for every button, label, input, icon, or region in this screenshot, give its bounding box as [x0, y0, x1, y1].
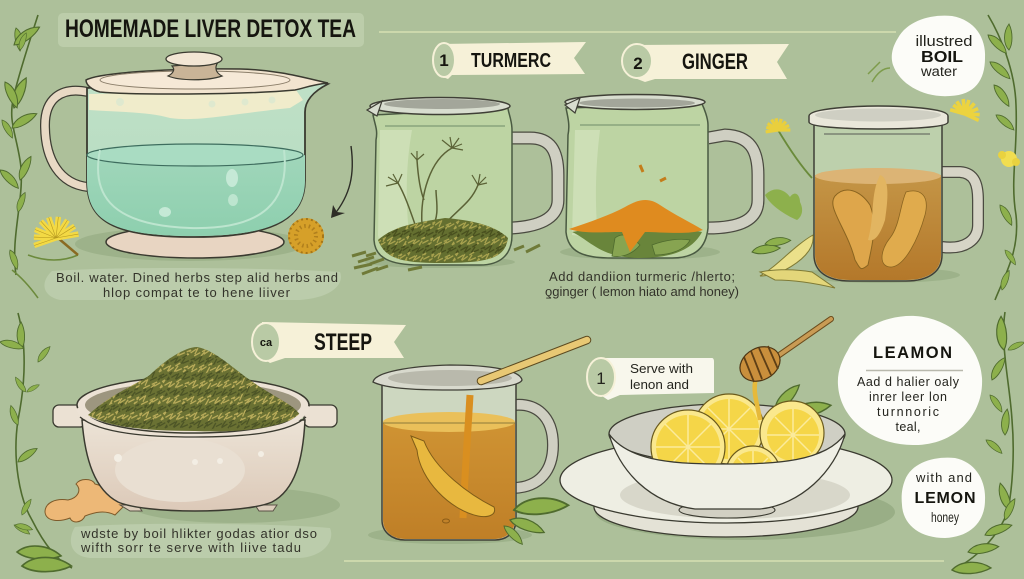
callout: leamon: [838, 316, 982, 445]
vine: bottom right: [952, 312, 1024, 574]
callout: leamon: LEAMON: [873, 344, 952, 362]
honey dipper: [775, 319, 831, 358]
step 2 ribbon: ginger: [622, 44, 789, 82]
plate and bowl of lemons: [560, 319, 895, 540]
small sprig: [868, 62, 890, 82]
callout: leamon: inrer leer lon: [869, 390, 947, 404]
callout: with lemon and honey: with and: [915, 470, 972, 485]
serve label: Serve with: [630, 362, 693, 376]
callout: illustrated boil water: [892, 16, 985, 96]
jar with turmeric: [560, 94, 758, 260]
step 2 ribbon: ginger: GINGER: [682, 49, 748, 74]
callout: leamon: teal,: [896, 420, 920, 434]
title: HOMEMADE LIVER DETOX TEA: [65, 15, 356, 43]
step 3 ribbon: steep: STEEP: [314, 329, 372, 356]
jar leaves: [513, 496, 569, 516]
callout: illustrated boil water: water: [920, 64, 958, 79]
ginger pieces: [833, 190, 874, 269]
step 1 ribbon: turmeric: 1: [439, 51, 449, 70]
caption: boil and serve: [71, 524, 331, 558]
caption: add dandelion: ƍginger ( lemon hiato amd honey): [545, 284, 739, 299]
herb mound: [88, 347, 300, 431]
icon: dandelion yellow: [30, 213, 79, 255]
caption: boil and serve: wdste by boil hlikter godas atior dso: [80, 526, 317, 541]
serve label: lenon and: [630, 378, 689, 392]
step: glass kettle with water: [45, 52, 328, 261]
arrow: [331, 146, 352, 218]
dandelions and leaves near mug: [751, 95, 985, 288]
herb stems: [398, 148, 478, 232]
callout: illustrated boil water: BOIL: [921, 49, 963, 66]
caption: boil water: hlop compat te to hene liiver: [103, 285, 291, 300]
step 1 ribbon: turmeric: TURMERC: [471, 50, 551, 72]
honey drip: [755, 378, 760, 420]
vine: top left: [0, 15, 78, 298]
caption: boil water: Boil. water. Dined herbs step alid herbs and: [56, 270, 338, 285]
steeping jar with tea: [368, 340, 587, 547]
dried herbs: [378, 218, 508, 263]
callout: illustrated boil water: illustred: [916, 33, 972, 50]
callout: leamon: turnnoric: [877, 405, 939, 419]
step 1 ribbon: turmeric: [433, 42, 586, 79]
ginger root: [45, 480, 125, 522]
step 2 ribbon: ginger: 2: [633, 54, 643, 73]
icon: dandelion puff: [288, 218, 324, 254]
serve label: 1: [596, 369, 606, 388]
mug with ginger tea: [800, 106, 978, 283]
bowl front: [609, 434, 845, 509]
serve label: [587, 358, 714, 400]
basil leaves: [770, 381, 802, 415]
bowl back: [609, 404, 845, 464]
title: [58, 13, 364, 47]
vine: bottom left: [0, 313, 72, 572]
ginger stick: [411, 436, 495, 517]
spoon: [481, 340, 587, 381]
caption: boil water: [44, 268, 341, 300]
step 3 ribbon: steep: [252, 322, 406, 363]
lemons: [694, 394, 764, 464]
step 3 ribbon: steep: ca: [260, 337, 273, 349]
vine: top right: [986, 15, 1020, 300]
pot with dried herbs and ginger: [45, 347, 340, 523]
caption: add dandelion: Add dandiion turmeric /hlerto;: [549, 269, 735, 284]
spilled herbs: [352, 245, 540, 274]
jar with herbs: [352, 96, 564, 276]
callout: with lemon and honey: [902, 458, 985, 538]
caption: add dandelion: [545, 269, 739, 299]
callout: leamon: Aad d halier oaly: [857, 375, 960, 389]
caption: boil and serve: wifth sorr te serve with liive tadu: [80, 540, 301, 555]
callout: with lemon and honey: honey: [931, 510, 959, 525]
callout: with lemon and honey: LEMON: [914, 490, 976, 507]
